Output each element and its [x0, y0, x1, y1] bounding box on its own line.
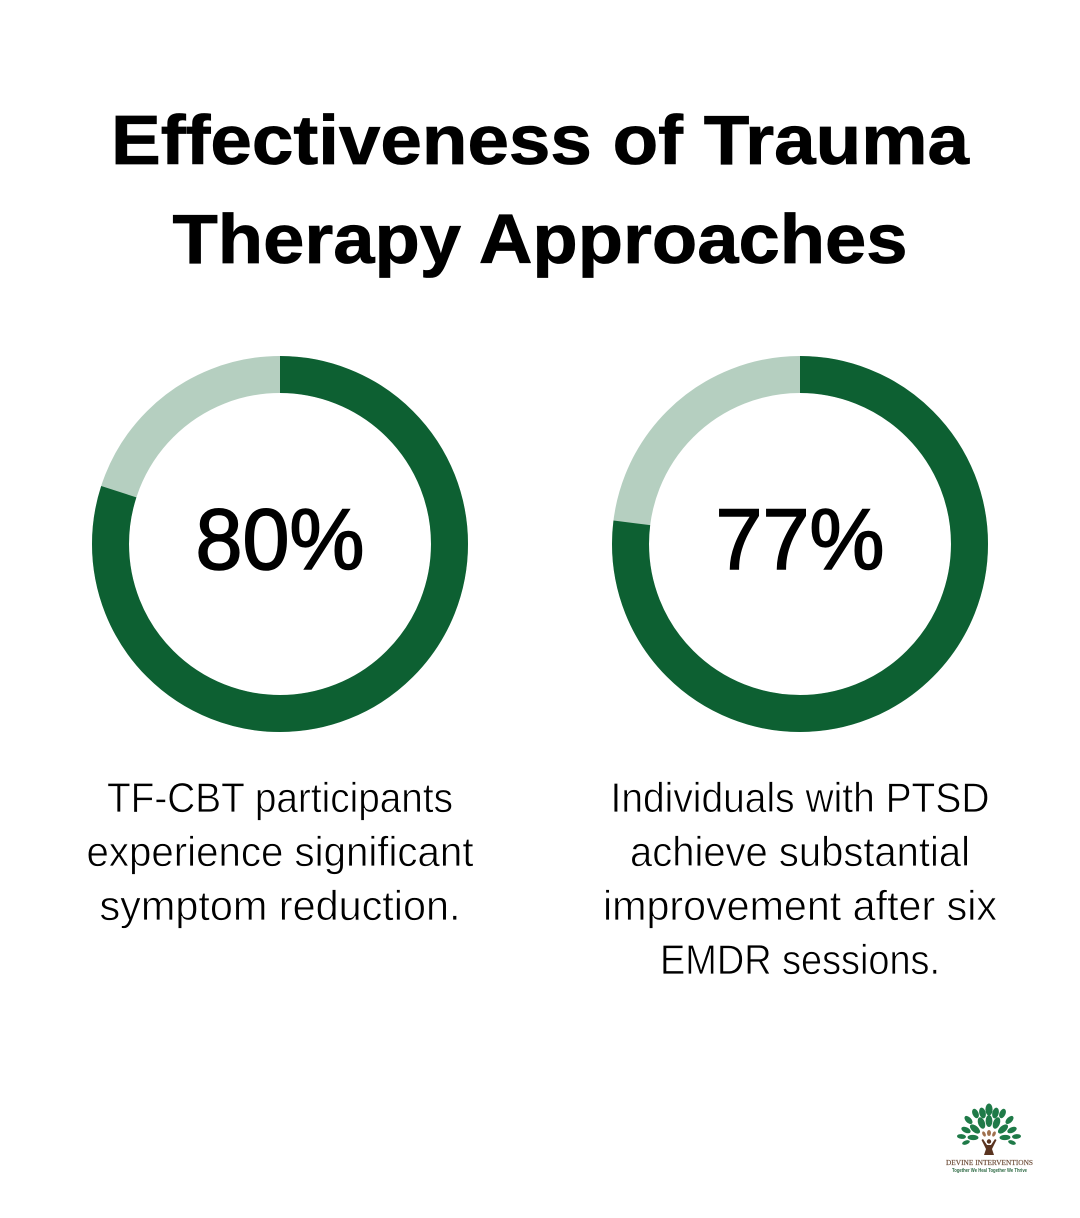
description: TF-CBT — [86, 774, 474, 929]
icon: tree figure — [982, 1139, 996, 1155]
title: Therapy Approaches — [172, 200, 907, 278]
description: EMDR: Individuals with PTSD — [610, 774, 990, 821]
description: TF-CBT: experience significant — [86, 828, 474, 875]
description: EMDR: achieve substantial — [630, 828, 970, 875]
title: Effectiveness of Trauma — [111, 101, 970, 179]
donut chart: 77% — [630, 374, 970, 714]
donut chart: 80% — [110, 374, 450, 714]
logo: Devine Interventions — [946, 1104, 1033, 1174]
panel: EMDR statistic — [603, 374, 997, 983]
description: EMDR: improvement after six — [603, 882, 997, 929]
description: TF-CBT: TF-CBT participants — [107, 774, 453, 821]
value: 77%: 77% — [716, 492, 884, 588]
description: EMDR — [603, 774, 997, 983]
logo tagline: Together We Heal Together We Thrive — [952, 1168, 1027, 1174]
value: 80%: 80% — [196, 492, 364, 588]
logo name: DEVINE INTERVENTIONS — [946, 1158, 1033, 1167]
description: EMDR: EMDR sessions. — [660, 936, 940, 983]
description: TF-CBT: symptom reduction. — [100, 882, 460, 929]
icon: small brown leaves — [981, 1130, 997, 1137]
panel: TF-CBT statistic — [86, 374, 474, 929]
icon: tree leaves — [957, 1104, 1021, 1146]
title — [111, 101, 970, 278]
